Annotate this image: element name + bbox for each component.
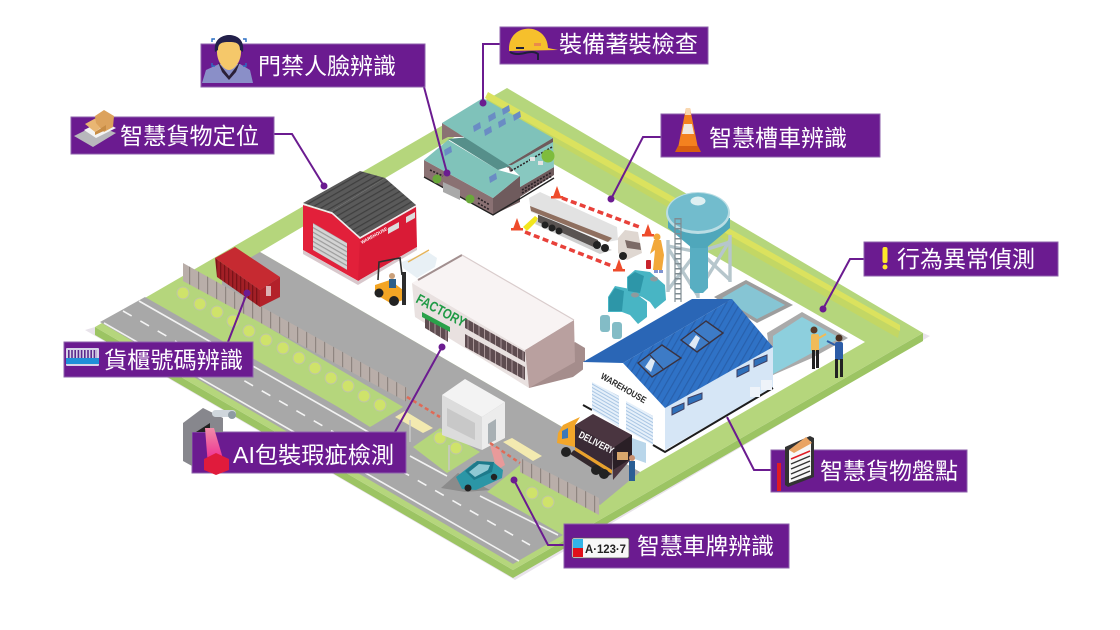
icon: cargo on AGV	[74, 110, 116, 147]
leader: license plate	[510, 476, 564, 545]
callout: 智慧車牌辨識	[564, 524, 789, 568]
icon: traffic cone	[675, 108, 701, 152]
callout: 智慧槽車辨識	[661, 108, 880, 157]
callout: 貨櫃號碼辨識	[64, 342, 253, 377]
front fence	[520, 458, 599, 515]
forklift with pallet	[374, 250, 437, 306]
two inspectors	[810, 326, 843, 378]
callout: 貨櫃號碼辨識: 貨櫃號碼辨識	[104, 347, 243, 373]
icon: exclamation mark	[882, 247, 888, 270]
leader: cargo positioning	[274, 134, 328, 190]
isometric ground platform	[85, 88, 930, 580]
factory building: FACTORY	[414, 291, 469, 330]
factory building	[412, 255, 585, 388]
red shipping container	[215, 247, 280, 307]
callout: 智慧貨物盤點	[771, 436, 967, 492]
icon: hard hat	[509, 29, 558, 60]
pools	[714, 280, 848, 375]
icon: face recognition	[202, 35, 253, 83]
red warehouse: WAREHOUSE	[360, 226, 388, 245]
gate barriers and crossings	[395, 397, 542, 470]
roadside shrubs	[177, 287, 554, 508]
icon: license plate: A·123·7	[585, 542, 626, 556]
icon: clipboard and pencil	[777, 436, 814, 491]
callout: 裝備著裝檢查	[500, 27, 708, 64]
teal roof office building	[424, 98, 554, 215]
fuel tanker truck	[523, 192, 642, 266]
callout: 智慧貨物定位	[71, 110, 274, 154]
red warehouse	[303, 171, 417, 285]
callout: 智慧貨物定位: 智慧貨物定位	[120, 123, 259, 149]
leader: inventory	[727, 417, 771, 470]
rear fence	[183, 263, 407, 402]
callout: 行為異常偵測: 行為異常偵測	[897, 246, 1035, 272]
delivery truck: DELIVERY	[577, 430, 616, 457]
safety cones and worker	[511, 186, 664, 273]
water tower	[666, 192, 730, 302]
icon: scanner and camera	[183, 408, 236, 475]
leader: face access	[424, 87, 450, 176]
callout: 智慧車牌辨識: 智慧車牌辨識	[637, 533, 774, 559]
delivery truck	[557, 414, 646, 481]
callout: AI包裝瑕疵檢測	[183, 408, 406, 475]
callout: 門禁人臉辨識	[201, 35, 425, 87]
leader: container number	[228, 290, 250, 342]
teal car	[441, 461, 503, 492]
leader: behavior	[820, 259, 864, 312]
lower highway road	[100, 297, 563, 564]
callout: AI包裝瑕疵檢測: AI包裝瑕疵檢測	[233, 442, 394, 468]
callout: 智慧槽車辨識: 智慧槽車辨識	[709, 125, 847, 151]
callout: 門禁人臉辨識: 門禁人臉辨識	[258, 53, 396, 79]
callout: 行為異常偵測	[864, 242, 1058, 276]
callout: 裝備著裝檢查: 裝備著裝檢查	[559, 31, 698, 57]
leader: AI defect	[395, 344, 446, 432]
inner gray yard road	[222, 252, 640, 505]
icon: barcode	[66, 348, 99, 366]
teal storage tanks and barrels	[600, 270, 666, 339]
leader: equipment check	[480, 44, 500, 106]
gate green islands	[335, 386, 480, 473]
callout: 智慧貨物盤點: 智慧貨物盤點	[820, 458, 958, 484]
blue warehouse	[583, 299, 773, 452]
leader: tanker	[608, 137, 661, 202]
guard booth	[442, 379, 505, 450]
blue warehouse: WAREHOUSE	[599, 371, 648, 405]
icon: license plate	[572, 538, 629, 558]
